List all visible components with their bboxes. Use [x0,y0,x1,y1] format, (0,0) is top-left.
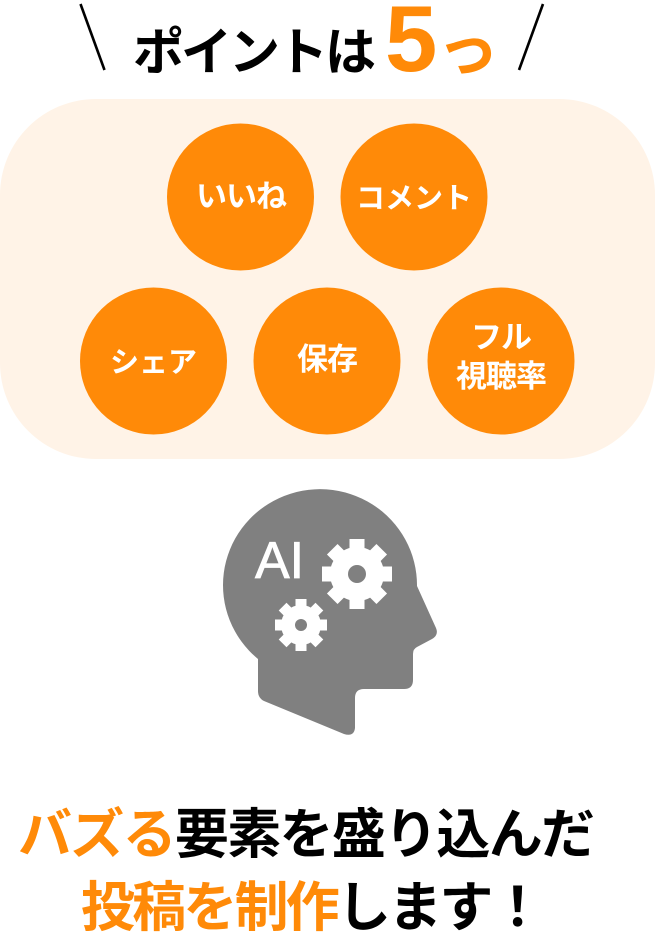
panel background [0,99,655,459]
circle: いいね: いいね [196,179,287,214]
circle: 保存: 保存 [297,342,357,377]
panel: five points [0,99,655,459]
large gear [322,539,392,609]
circle: フル視聴率: フル [471,320,532,355]
message line 2: 投稿を制作します！ [81,878,542,938]
icon: AI head with gears [223,489,437,735]
circle: コメント: コメント [356,183,472,215]
circle: シェア: シェア [110,347,197,379]
closing message [18,805,593,938]
circle: いいね [167,124,314,270]
circle: フル視聴率 [428,288,574,434]
heading text black: ポイントは [133,24,375,81]
left slash [80,4,104,70]
AI label: AI [255,532,304,590]
heading: ポイントは5つ [80,0,543,91]
right slash [519,4,543,70]
circle: コメント [340,124,488,270]
message line 1: バズる要素を盛り込んだ [18,805,593,865]
circle: 保存 [254,288,400,434]
small gear [275,599,327,651]
head silhouette [223,489,437,735]
circle: シェア [80,288,227,434]
small tsu: っ [437,16,499,85]
circle: フル視聴率: 視聴率 [456,359,546,394]
